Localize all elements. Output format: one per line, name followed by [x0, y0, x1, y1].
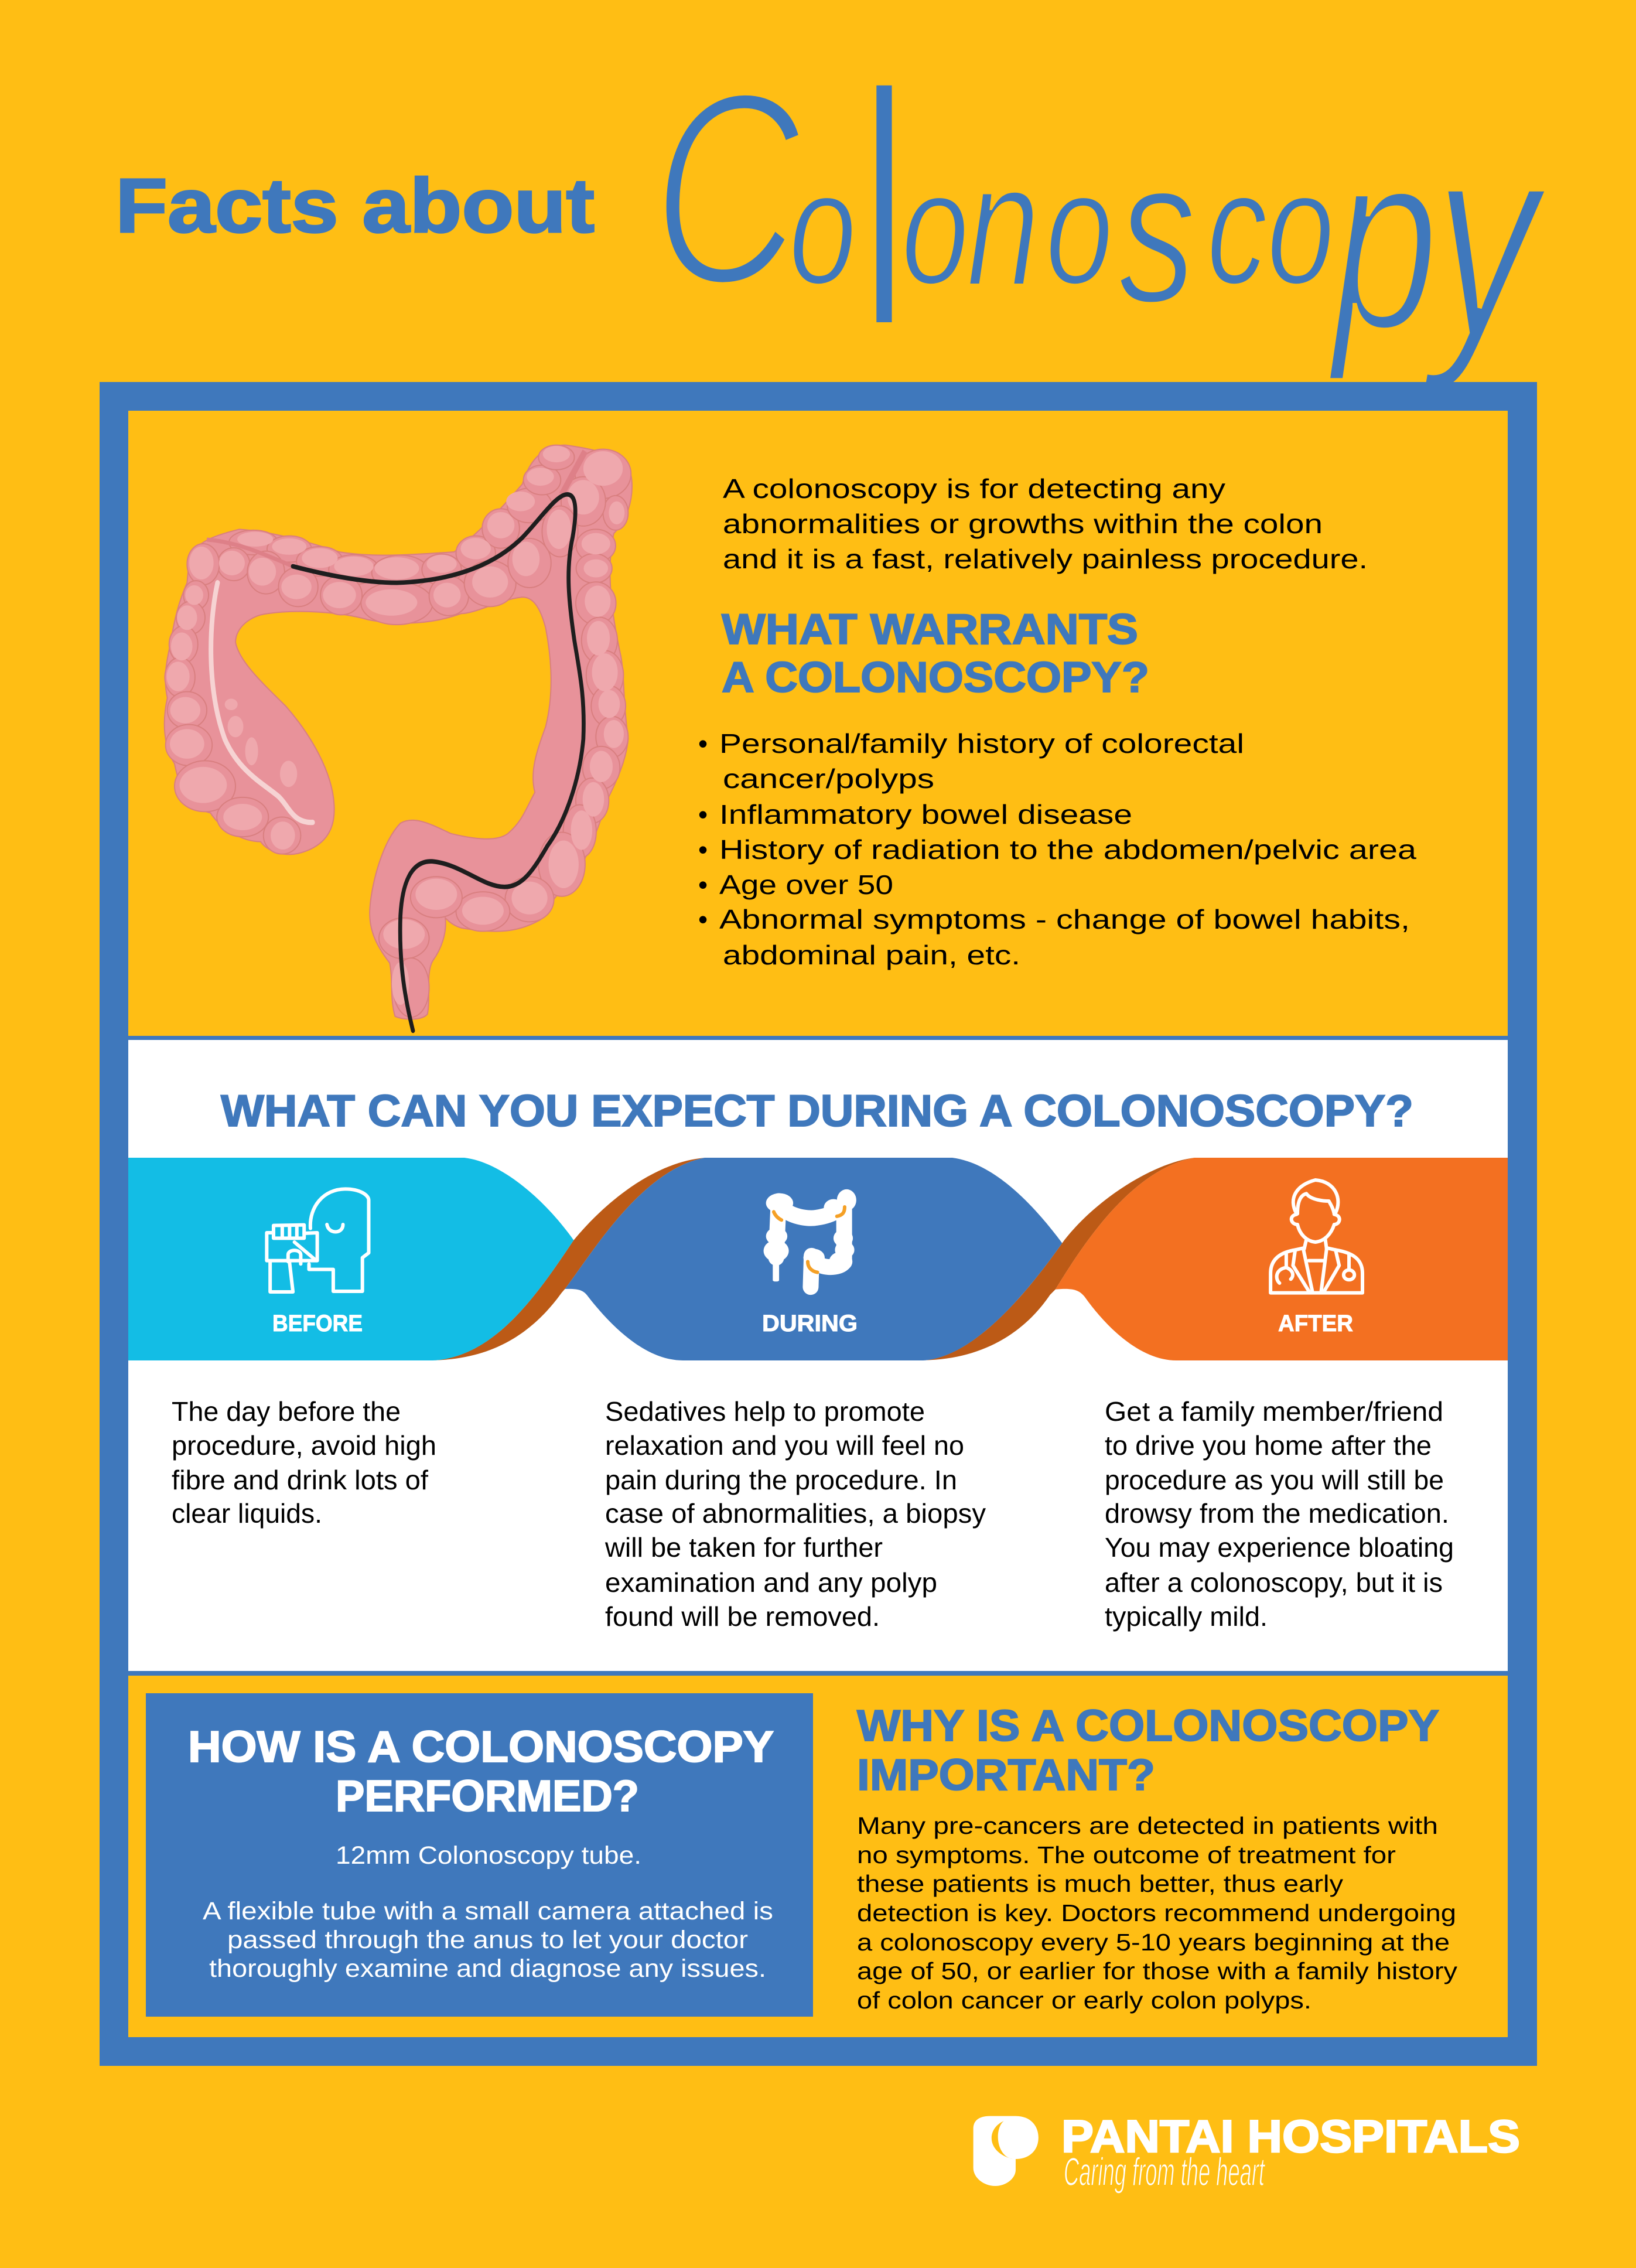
heading: what warrants: WHAT WARRANTS [722, 606, 1138, 653]
heading: what warrants [722, 606, 1149, 701]
text: how description: thoroughly examine and diagnose any issues. [209, 1955, 766, 1983]
title: Colonoscopy script: o [1267, 137, 1334, 318]
outer blue frame [100, 382, 1537, 2066]
bullet list: Inflammatory bowel disease [719, 799, 1132, 830]
icon: patient reading [267, 1189, 368, 1292]
text: tube size: 12mm Colonoscopy tube. [336, 1841, 641, 1870]
band: before [128, 1158, 573, 1360]
text: after column: to drive you home after the [1105, 1430, 1432, 1461]
bullet list: abdominal pain, etc. [723, 940, 1020, 970]
icon: doctor [1270, 1180, 1362, 1293]
text: why description: Many pre-cancers are detected in patients with [857, 1812, 1438, 1839]
text: how description: A flexible tube with a small camera attached is [203, 1897, 773, 1925]
label: after: AFTER [1278, 1311, 1353, 1336]
panel: bottom yellow [128, 1676, 1508, 2037]
text: after column: You may experience bloating [1105, 1532, 1454, 1563]
text: before column [172, 1396, 436, 1529]
title: Colonoscopy script: s [1119, 116, 1196, 346]
heading: Facts about: Facts about [115, 162, 595, 248]
brown fold left [433, 1158, 705, 1360]
title: Colonoscopy script: C [652, 35, 804, 343]
icon: colon [764, 1189, 856, 1287]
text: after column: after a colonoscopy, but it is [1105, 1567, 1443, 1598]
heading: why important: WHY IS A COLONOSCOPY [857, 1701, 1439, 1750]
text: before column: fibre and drink lots of [172, 1465, 428, 1495]
intro paragraph: abnormalities or growths within the colon [723, 509, 1323, 539]
band: during [565, 1158, 1062, 1360]
panel: intro yellow [128, 411, 1508, 1036]
title: Colonoscopy script: n [966, 127, 1040, 323]
colon body [165, 445, 632, 1019]
band: after [1056, 1158, 1508, 1360]
heading: what warrants: A COLONOSCOPY? [722, 654, 1149, 701]
text: why description: age of 50, or earlier for those with a family history [857, 1957, 1458, 1984]
text: after column: Get a family member/friend [1105, 1396, 1443, 1427]
title: Colonoscopy script: y [1422, 86, 1550, 394]
text: why description: detection is key. Doctors recommend undergoing [857, 1899, 1456, 1926]
text: why description: of colon cancer or early colon polyps. [857, 1987, 1311, 2014]
text: why description: these patients is much better, thus early [857, 1870, 1344, 1897]
label: during: DURING [762, 1311, 858, 1336]
logo: hospital name: PANTAI HOSPITALS [1061, 2110, 1520, 2162]
title: Colonoscopy script: o [1046, 137, 1113, 318]
label: before: BEFORE [272, 1311, 363, 1336]
heading: how performed: HOW IS A COLONOSCOPY [188, 1722, 774, 1771]
title: Colonoscopy script: o [901, 137, 969, 318]
illustration: colon with colonoscope [165, 445, 632, 1031]
brown fold right [923, 1158, 1194, 1360]
bullet list: Age over 50 [719, 869, 893, 900]
text: before column: clear liquids. [172, 1498, 322, 1529]
text: during column: examination and any polyp [605, 1567, 937, 1598]
title: Colonoscopy script: p [1327, 98, 1439, 384]
text: before column: The day before the [172, 1396, 401, 1427]
haustra highlights [166, 446, 624, 1005]
bullet list [698, 728, 1417, 970]
heading: why important: IMPORTANT? [857, 1750, 1155, 1799]
text: before column: procedure, avoid high [172, 1430, 436, 1461]
bullet list: Personal/family history of colorectal [719, 728, 1244, 759]
bullet list: • [698, 834, 708, 865]
haustra bulges [165, 445, 631, 1017]
bullet list: History of radiation to the abdomen/pelvic area [719, 834, 1417, 865]
title: Colonoscopy script: c [1207, 137, 1268, 318]
intro paragraph: A colonoscopy is for detecting any [723, 473, 1225, 504]
text: during column: found will be removed. [605, 1601, 880, 1632]
band strip top right [562, 451, 585, 494]
heading: what can you expect: WHAT CAN YOU EXPECT DURING A COLONOSCOPY? [221, 1086, 1413, 1136]
text: after column: drowsy from the medication. [1105, 1498, 1449, 1529]
bullet list: • [698, 869, 708, 900]
intro paragraph [723, 473, 1368, 574]
logo: tagline: Caring from the heart [1064, 2150, 1266, 2194]
text: after column: procedure as you will still be [1105, 1465, 1444, 1495]
text: how description [203, 1897, 773, 1983]
text: why description: a colonoscopy every 5-10 years beginning at the [857, 1929, 1450, 1956]
text: why description: no symptoms. The outcome of treatment for [857, 1841, 1396, 1868]
panel: what to expect white [128, 1040, 1508, 1671]
band strip [207, 540, 293, 567]
logo: Pantai P mark [974, 2116, 1039, 2186]
panel: how is a colonoscopy performed [146, 1693, 813, 2017]
colonoscope tube [293, 494, 583, 1031]
text: during column: pain during the procedure. In [605, 1465, 957, 1495]
text: why description [857, 1812, 1458, 2014]
heading: how performed [188, 1722, 774, 1820]
bullet list: • [698, 904, 708, 935]
text: during column: will be taken for further [604, 1532, 883, 1563]
text: during column: case of abnormalities, a biopsy [605, 1498, 986, 1529]
text: after column [1105, 1396, 1454, 1632]
text: during column [604, 1396, 986, 1632]
bullet list: • [698, 799, 708, 830]
bullet list: cancer/polyps [723, 763, 934, 794]
bullet list: Abnormal symptoms - change of bowel habits, [719, 904, 1410, 935]
text: during column: Sedatives help to promote [605, 1396, 925, 1427]
divider line [128, 1671, 1508, 1676]
intro paragraph: and it is a fast, relatively painless procedure. [723, 544, 1368, 574]
title: Colonoscopy script: l [856, 19, 913, 399]
text: how description: passed through the anus to let your doctor [227, 1926, 748, 1954]
text: after column: typically mild. [1105, 1601, 1268, 1632]
heading: how performed: PERFORMED? [336, 1771, 639, 1820]
cecum white tube [211, 583, 313, 823]
heading: why important [857, 1701, 1439, 1799]
bullet list: • [698, 728, 708, 759]
title: Colonoscopy script: o [789, 137, 856, 318]
text: during column: relaxation and you will feel no [605, 1430, 964, 1461]
